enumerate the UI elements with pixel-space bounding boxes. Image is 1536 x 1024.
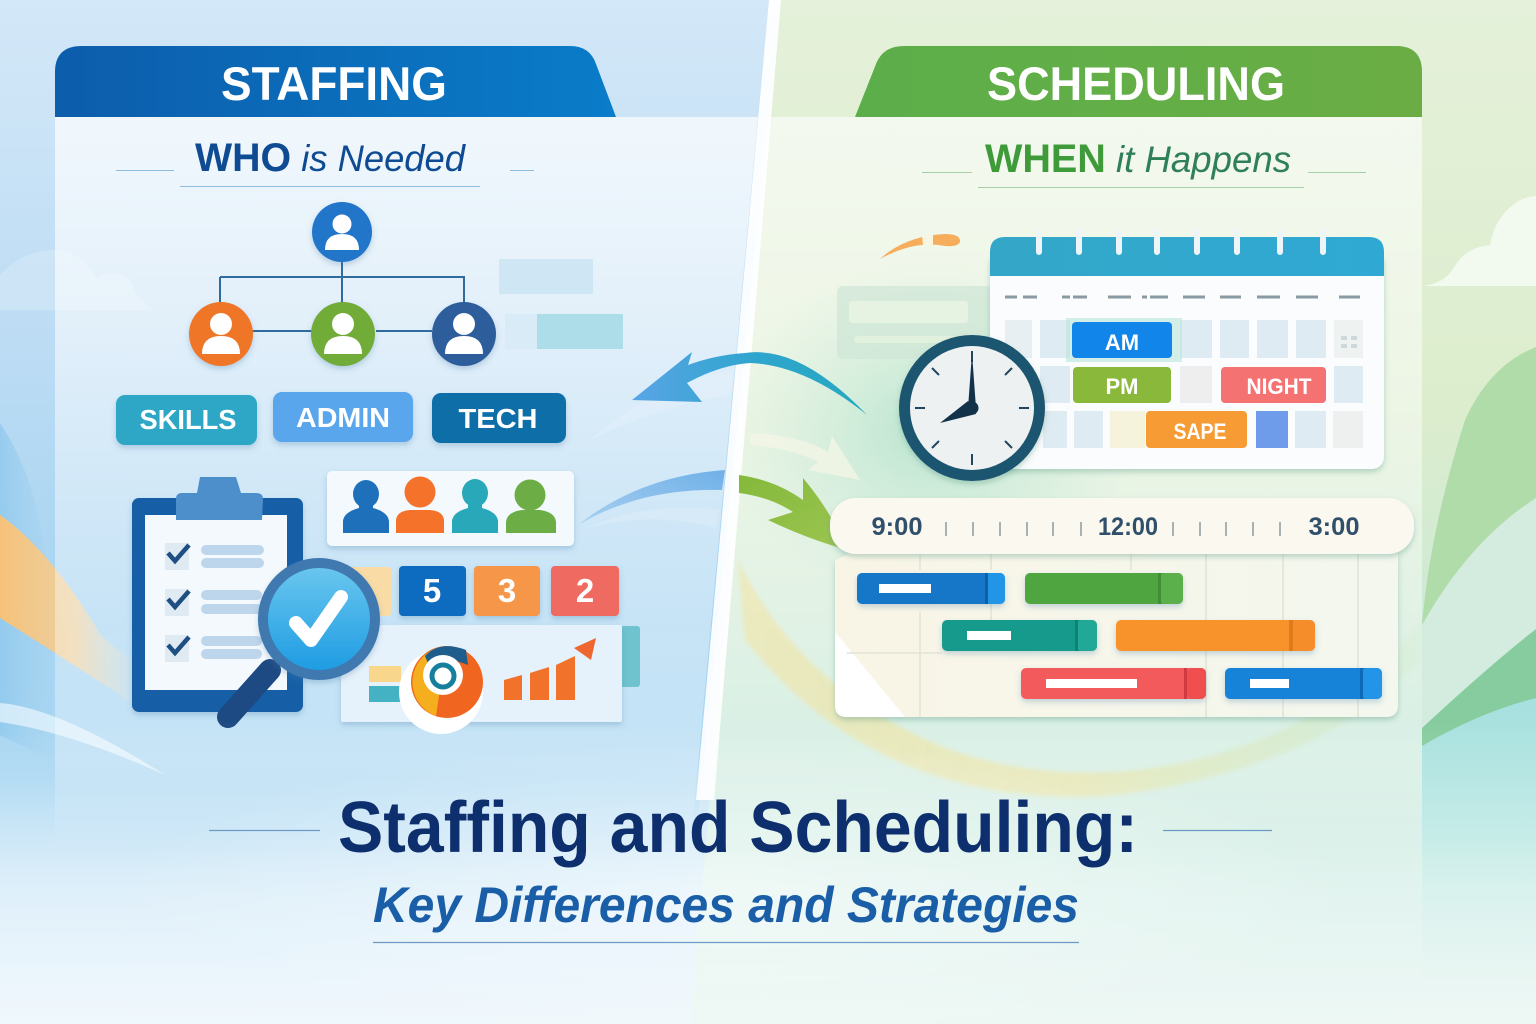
icon: team people	[343, 476, 556, 533]
arrow: scheduling to staffing	[632, 352, 867, 415]
checklist rows	[165, 543, 259, 662]
shift: PM: PM	[1106, 374, 1138, 399]
tile: 2	[551, 566, 619, 616]
icon: bar chart with arrow	[504, 638, 596, 700]
tile: 5: 5	[423, 572, 441, 609]
right cloud	[1422, 196, 1536, 286]
title: Staffing and Scheduling:	[338, 788, 1138, 868]
tag: tech	[432, 393, 566, 443]
clipboard	[132, 477, 303, 712]
time ruler: 12:00	[1098, 513, 1158, 541]
tile: 3	[474, 566, 540, 616]
tile: 2: 2	[576, 572, 594, 609]
tile: 5	[399, 566, 466, 616]
clipboard clip	[176, 477, 263, 520]
clock glow	[720, 260, 1140, 600]
shift: PM	[1073, 367, 1171, 403]
timeline panel	[830, 498, 1414, 717]
center divider	[696, 0, 781, 800]
org chart	[189, 202, 496, 366]
shift: NIGHT: NIGHT	[1246, 374, 1312, 399]
time ruler: 3:00	[1308, 513, 1360, 541]
left hill	[0, 423, 52, 760]
left cloud	[0, 250, 155, 310]
header: scheduling: SCHEDULING	[987, 57, 1285, 110]
subheading: who is needed: WHO is Needed	[195, 136, 466, 180]
right hills	[1422, 347, 1536, 700]
shift: AM: AM	[1105, 330, 1139, 355]
time ruler	[830, 498, 1414, 554]
faded cards	[499, 259, 623, 349]
decorative comet	[880, 234, 960, 259]
tag: tech: TECH	[458, 403, 538, 434]
orange wave	[0, 515, 135, 705]
center fade	[120, 740, 1360, 1024]
icon: orange person	[189, 302, 253, 366]
icon: top person	[312, 202, 372, 262]
timeline grid	[847, 553, 1358, 717]
number tiles	[345, 566, 619, 616]
blue swoosh	[578, 470, 725, 525]
header: staffing	[55, 46, 616, 117]
calendar	[990, 232, 1384, 469]
white corner	[835, 632, 905, 717]
panel: staffing background	[55, 117, 758, 850]
header: staffing: STAFFING	[221, 57, 447, 110]
calendar weekday row	[1005, 296, 1360, 298]
team card	[327, 471, 574, 546]
bottom fade	[0, 720, 1536, 1024]
subheading: when it happens: WHEN it Happens	[985, 137, 1291, 181]
arrow: staffing to scheduling	[739, 475, 848, 550]
gantt bars	[857, 573, 1382, 699]
icon: green person	[311, 302, 375, 366]
faint arrow	[750, 433, 860, 480]
faded card behind clock	[837, 286, 992, 359]
tile: 3: 3	[498, 572, 516, 609]
yellow swoosh	[738, 560, 1422, 797]
tag: admin: ADMIN	[296, 402, 390, 433]
left wave streaks	[580, 370, 735, 530]
icon: clock	[899, 335, 1045, 481]
tags	[116, 392, 566, 445]
shift: SAVE: SAPE	[1174, 419, 1226, 444]
icon: donut chart	[399, 646, 483, 734]
tag: skills	[116, 395, 257, 445]
tag: skills: SKILLS	[140, 404, 236, 435]
tag: admin	[273, 392, 413, 442]
panel: scheduling background	[695, 117, 1422, 850]
small grid glyph	[1341, 336, 1357, 348]
subheading: when it happens	[922, 137, 1366, 188]
white wave	[0, 703, 165, 775]
time ruler: 9:00	[872, 513, 922, 541]
subtitle: Key Differences and Strategies	[373, 877, 1079, 933]
calendar empty cells	[1005, 320, 1363, 448]
shift: NIGHT	[1221, 367, 1326, 403]
subheading: who is needed	[116, 136, 534, 186]
icon: magnifying glass	[228, 563, 375, 717]
icon: navy person	[432, 302, 496, 366]
analytics card	[341, 625, 640, 734]
shift: AM	[1066, 318, 1182, 362]
header: scheduling	[855, 46, 1422, 117]
shift: SAVE	[1146, 411, 1247, 448]
calendar binding rings	[1039, 232, 1323, 252]
